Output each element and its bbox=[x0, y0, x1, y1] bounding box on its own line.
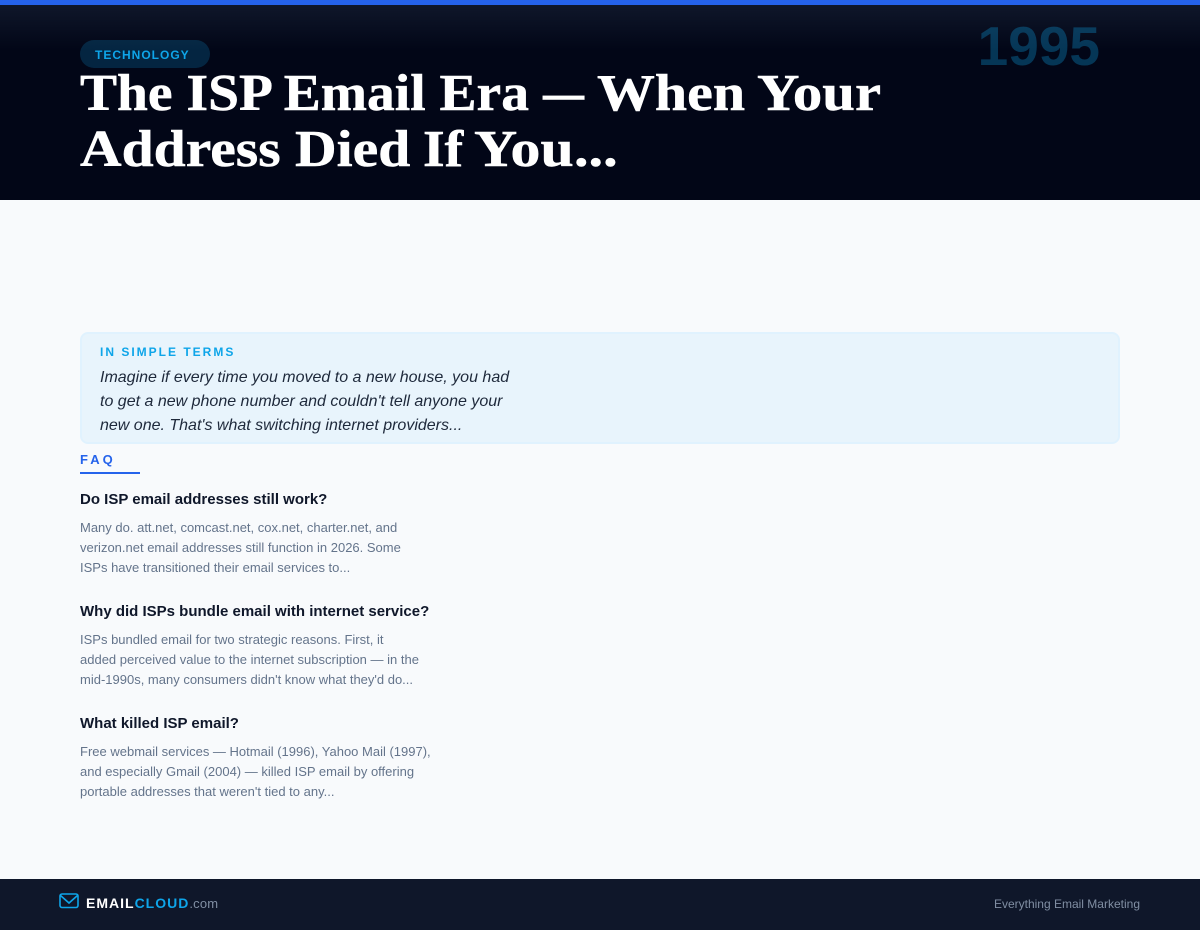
answer 2: added perceived value to the internet subscription — in the bbox=[80, 652, 419, 667]
brand name: EMAILCLOUD.com bbox=[86, 895, 218, 911]
title: — bbox=[543, 65, 584, 122]
FAQ item 3 bbox=[80, 715, 431, 799]
question 1: Do ISP email addresses still work? bbox=[80, 491, 327, 508]
title: Address Died bbox=[80, 121, 410, 178]
title: You bbox=[474, 121, 574, 178]
answer 1 bbox=[80, 520, 401, 575]
question 3: What killed ISP email? bbox=[80, 715, 239, 732]
title: Your bbox=[757, 65, 881, 122]
tagline: Everything Email Marketing bbox=[994, 897, 1140, 911]
callout text: to get a new phone number and couldn't tell anyone your bbox=[100, 393, 502, 410]
badge label: TECHNOLOGY bbox=[95, 48, 190, 62]
callout text: new one. That's what switching internet providers... bbox=[100, 417, 462, 434]
icon: envelope bbox=[59, 893, 79, 908]
answer 3: and especially Gmail (2004) — killed ISP email by offering bbox=[80, 764, 414, 779]
answer 1: Many do. att.net, comcast.net, cox.net, charter.net, and bbox=[80, 520, 397, 535]
title: If bbox=[423, 121, 463, 178]
question 2: Why did ISPs bundle email with internet service? bbox=[80, 603, 429, 620]
answer 3: Free webmail services — Hotmail (1996), Yahoo Mail (1997), bbox=[80, 744, 431, 759]
title bbox=[80, 65, 881, 178]
answer 3: portable addresses that weren't tied to any... bbox=[80, 784, 334, 799]
top accent bar bbox=[0, 0, 1200, 5]
category badge bbox=[80, 40, 210, 68]
title: When bbox=[597, 65, 745, 122]
panel: in simple terms bbox=[80, 332, 1120, 444]
callout text bbox=[100, 369, 510, 434]
year watermark: 1995 bbox=[978, 15, 1100, 77]
header band bbox=[0, 0, 1200, 200]
answer 2 bbox=[80, 632, 419, 687]
footer bbox=[0, 879, 1200, 930]
title: The ISP Email Era bbox=[80, 65, 529, 122]
FAQ item 1 bbox=[80, 491, 401, 575]
answer 2: ISPs bundled email for two strategic reasons. First, it bbox=[80, 632, 383, 647]
answer 2: mid-1990s, many consumers didn't know what they'd do... bbox=[80, 672, 413, 687]
callout text: Imagine if every time you moved to a new house, you had bbox=[100, 369, 509, 386]
title: ... bbox=[574, 121, 618, 178]
FAQ heading bbox=[80, 452, 140, 474]
answer 3 bbox=[80, 744, 431, 799]
callout label: IN SIMPLE TERMS bbox=[100, 345, 235, 359]
answer 1: verizon.net email addresses still function in 2026. Some bbox=[80, 540, 401, 555]
FAQ item 2 bbox=[80, 603, 429, 687]
FAQ label: FAQ bbox=[80, 452, 116, 467]
answer 1: ISPs have transitioned their email services to... bbox=[80, 560, 350, 575]
